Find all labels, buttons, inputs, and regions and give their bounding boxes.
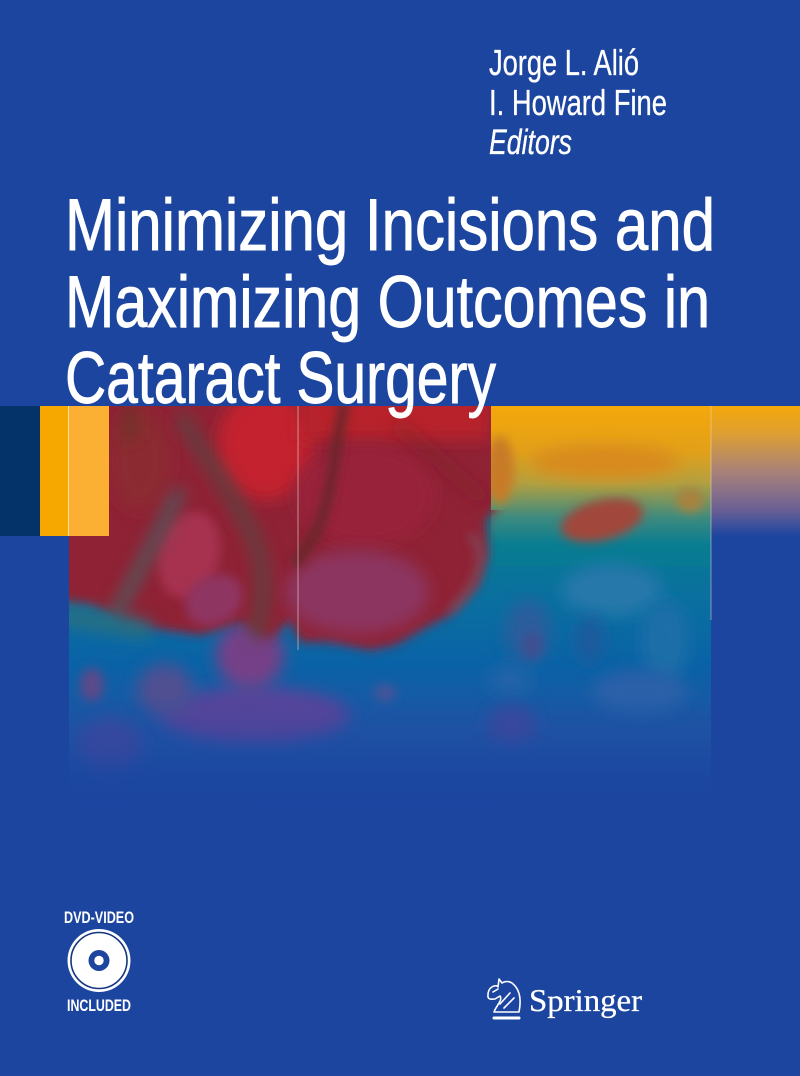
thin vertical lines — [298, 406, 711, 650]
dark veins — [180, 415, 263, 640]
photo: blurred topography map — [69, 406, 711, 770]
icon: knight — [488, 979, 520, 1018]
editors: Jorge L. Alió — [489, 42, 639, 83]
editors: I. Howard Fine — [489, 82, 667, 123]
DVD badge: INCLUDED — [67, 996, 131, 1015]
orange gradient strip at right — [711, 406, 800, 536]
red lobe, left — [50, 390, 500, 650]
publisher logo — [488, 979, 642, 1018]
DVD badge — [64, 909, 134, 1015]
publisher logo: Springer — [529, 982, 642, 1018]
lower purple haze — [78, 621, 536, 771]
colour blocks at left — [0, 406, 109, 536]
icon: disc — [68, 929, 130, 992]
title — [65, 185, 715, 419]
editors — [489, 42, 667, 162]
title: Cataract Surgery — [65, 338, 496, 419]
DVD badge: DVD-VIDEO — [64, 909, 134, 927]
editors: Editors — [489, 123, 572, 162]
soft brown edge of red lobe — [450, 535, 480, 612]
blue patches right — [488, 564, 689, 714]
orange upper right — [491, 406, 711, 550]
